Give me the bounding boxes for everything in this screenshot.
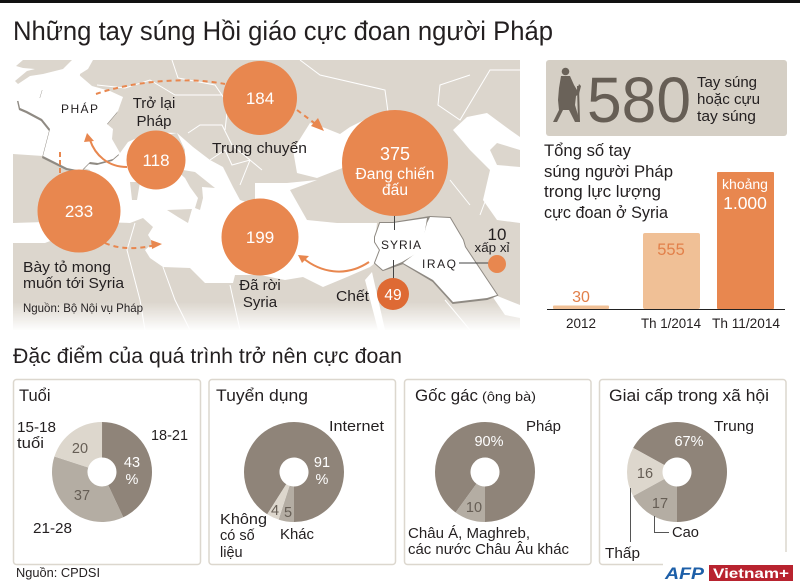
panel: social class — [600, 380, 786, 564]
social class labels: 17 — [652, 496, 668, 512]
panel: origin — [404, 380, 591, 564]
donut chart: origin — [440, 427, 530, 517]
recruitment labels: 91 — [314, 455, 330, 471]
panel: 580 fighters — [546, 60, 787, 136]
bar chart — [547, 172, 785, 331]
age labels: 21-28 — [33, 521, 72, 537]
panel: map — [13, 60, 520, 331]
arrows — [60, 80, 369, 272]
donut chart: social class — [633, 428, 721, 516]
icon: soldier — [553, 68, 581, 122]
map labels: Bày tỏ mong — [23, 259, 111, 276]
bar: November 2014: 1.000 — [723, 193, 767, 213]
panel: origin: Gốc gác — [415, 387, 478, 405]
social class labels: 16 — [637, 466, 653, 482]
bar: November 2014 — [717, 172, 774, 309]
age labels: % — [126, 472, 139, 488]
bar chart heading: Tổng số tay — [544, 141, 631, 160]
circle: 184 transit — [223, 61, 297, 135]
recruitment labels: 4 — [271, 503, 279, 519]
circle: 10 Iraq — [488, 255, 506, 273]
age labels: 20 — [72, 441, 88, 457]
map labels: IRAQ — [422, 257, 456, 271]
age labels: 15-18 — [17, 420, 56, 436]
bar: January 2014: 555 — [657, 241, 685, 259]
map labels: Trung chuyển — [212, 140, 307, 157]
axis labels: Th 1/2014 — [641, 316, 701, 331]
bar: November 2014: khoảng — [722, 176, 768, 192]
map labels: PHÁP — [61, 101, 98, 116]
panel: recruitment — [209, 380, 396, 564]
axis labels: Th 11/2014 — [712, 316, 780, 331]
map labels: xấp xỉ — [474, 241, 510, 255]
logo: AFP: AFP — [664, 564, 705, 583]
panel: recruitment: Tuyển dụng — [216, 387, 308, 405]
bar chart heading: cực đoan ở Syria — [544, 203, 669, 222]
panel: age — [14, 380, 200, 564]
origin labels — [408, 419, 569, 558]
origin labels: các nước Châu Âu khác — [408, 541, 569, 558]
label: fighters: tay súng — [697, 108, 756, 125]
bar chart heading — [544, 141, 673, 222]
age labels: 43 — [124, 455, 140, 471]
recruitment labels: Khác — [280, 527, 314, 543]
circle: 199 left Syria: 199 — [246, 228, 274, 247]
bar: 2012 — [553, 289, 609, 309]
leader lines — [394, 215, 490, 280]
age labels: 37 — [74, 488, 90, 504]
bar chart heading: trong lực lượng — [544, 182, 661, 201]
origin labels: Châu Á, Maghreb, — [408, 525, 530, 542]
origin labels: Pháp — [526, 419, 561, 435]
circle: 375 fighting: Đang chiến — [356, 166, 434, 183]
social class labels: Thấp — [605, 546, 640, 562]
map labels: Trở lại — [133, 95, 175, 112]
circle: 49 dead — [377, 278, 409, 310]
bar: January 2014 — [643, 233, 700, 309]
map labels: Nguồn: Bộ Nội vụ Pháp — [23, 301, 143, 315]
origin labels: 90% — [474, 434, 504, 450]
France shape — [17, 74, 123, 173]
circle: 49 dead: 49 — [384, 287, 402, 304]
logo: Vietnam+: Vietnam+ — [713, 565, 789, 581]
panel: social class: Giai cấp trong xã hội — [609, 387, 769, 405]
label: fighters — [697, 74, 760, 125]
map labels: 10 — [488, 225, 506, 244]
bar: 2012: 30 — [572, 289, 590, 306]
circle: 375 fighting: đấu — [382, 182, 408, 199]
map labels — [23, 95, 510, 315]
recruitment labels: Không — [220, 512, 267, 528]
map land and sea — [13, 60, 520, 331]
age labels: tuổi — [17, 436, 44, 452]
title: Những tay súng Hồi giáo cực đoan người Pháp — [13, 16, 553, 46]
donut chart: recruitment — [249, 427, 339, 517]
map labels: SYRIA — [381, 238, 421, 252]
circle: 375 fighting — [342, 110, 448, 216]
recruitment labels: Internet — [329, 419, 384, 435]
circle: 118 returned: 118 — [142, 151, 170, 170]
axis labels — [566, 316, 780, 331]
social class labels: Trung — [714, 419, 754, 435]
donut chart: age — [59, 429, 145, 515]
age labels — [17, 420, 188, 537]
label: fighters: hoặc cựu — [697, 91, 760, 108]
panel: age: Tuổi — [19, 387, 50, 405]
panel: origin: (ông bà) — [482, 389, 536, 404]
map labels: Syria — [243, 294, 278, 311]
map labels: Đã rời — [239, 277, 281, 294]
circle: 199 left Syria — [222, 198, 298, 276]
social class labels: 67% — [674, 434, 704, 450]
map labels: Chết — [336, 288, 370, 305]
recruitment labels — [220, 419, 384, 561]
bar chart heading: súng người Pháp — [544, 162, 673, 181]
circle: 118 returned — [126, 130, 186, 190]
number 580: 580 — [587, 64, 691, 136]
recruitment labels: liệu — [220, 545, 243, 561]
circle: 184 transit: 184 — [246, 89, 274, 108]
label: fighters: Tay súng — [697, 74, 757, 91]
origin labels: 10 — [466, 500, 482, 516]
section heading: Đặc điểm của quá trình trở nên cực đoan — [13, 345, 402, 368]
axis labels: 2012 — [566, 316, 596, 331]
circle: 233 wishing to go: 233 — [65, 202, 93, 221]
source: Nguồn: CPDSI — [16, 565, 100, 580]
recruitment labels: % — [316, 472, 329, 488]
Syria and Iraq shapes — [375, 217, 497, 303]
social class labels: Cao — [672, 525, 699, 541]
recruitment labels: 5 — [284, 505, 292, 521]
age labels: 18-21 — [151, 428, 188, 444]
circle: 233 wishing to go — [38, 170, 120, 252]
map labels: Pháp — [136, 113, 172, 130]
recruitment labels: có số — [220, 528, 255, 544]
circle: 375 fighting: 375 — [380, 144, 410, 164]
social class labels — [605, 419, 754, 562]
map labels: muốn tới Syria — [23, 275, 125, 292]
